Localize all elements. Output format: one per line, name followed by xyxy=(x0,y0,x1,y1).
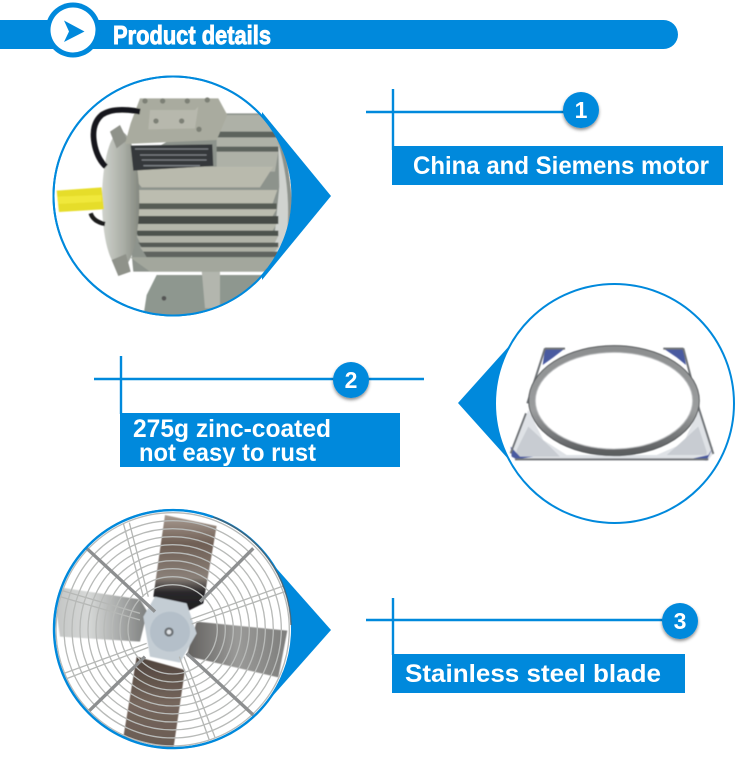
number badge 3: 3 xyxy=(674,608,686,634)
pointer triangle xyxy=(262,552,331,708)
grille rings xyxy=(56,513,289,746)
heading: Product details: Product details xyxy=(113,20,271,50)
number badge 1 xyxy=(563,92,599,128)
icon: play badge xyxy=(46,2,100,58)
number badge 2 xyxy=(333,362,369,398)
header banner xyxy=(0,2,678,58)
yellow shaft xyxy=(57,187,104,212)
fan dark rim xyxy=(213,517,291,625)
ring illustration xyxy=(511,346,713,461)
grille spokes xyxy=(87,548,253,715)
label: Stainless steel blade xyxy=(392,654,685,693)
panel: motor photo xyxy=(54,76,331,317)
label: 275g zinc-coated: 275g zinc-coated xyxy=(133,415,331,443)
callout 3 xyxy=(366,598,698,693)
terminal box xyxy=(125,98,227,144)
cables xyxy=(93,110,140,167)
label: China and Siemens motor xyxy=(392,146,723,185)
label: 275g zinc-coated: not easy to rust xyxy=(139,439,317,467)
motor circle frame xyxy=(54,76,292,316)
number badge 3 xyxy=(662,603,698,639)
ring circle frame xyxy=(495,284,734,523)
end shield xyxy=(102,132,139,268)
leader lines xyxy=(366,89,566,150)
panel: zinc-coated ring photo xyxy=(458,284,734,523)
header bar xyxy=(0,20,678,49)
fan blue rim xyxy=(54,510,284,748)
label: 275g zinc-coated xyxy=(120,413,400,467)
cooling fins xyxy=(125,167,273,187)
pointer triangle xyxy=(458,325,528,481)
callout 2 xyxy=(94,356,424,467)
nameplate xyxy=(131,144,213,171)
callout 1 xyxy=(366,89,723,185)
number badge 1: 1 xyxy=(575,97,588,123)
fan illustration xyxy=(56,513,289,749)
fan circle frame xyxy=(54,510,292,748)
motor circle rim xyxy=(54,76,292,316)
label: Stainless steel blade: Stainless steel blade xyxy=(405,660,661,688)
label: China and Siemens motor: China and Siemens motor xyxy=(413,152,709,180)
panel: fan blade photo xyxy=(54,510,331,749)
leader lines xyxy=(366,598,665,655)
leader lines xyxy=(94,356,424,414)
number badge 2: 2 xyxy=(345,367,357,393)
pointer triangle xyxy=(262,112,331,280)
motor illustration xyxy=(57,97,293,317)
blades xyxy=(57,515,287,749)
